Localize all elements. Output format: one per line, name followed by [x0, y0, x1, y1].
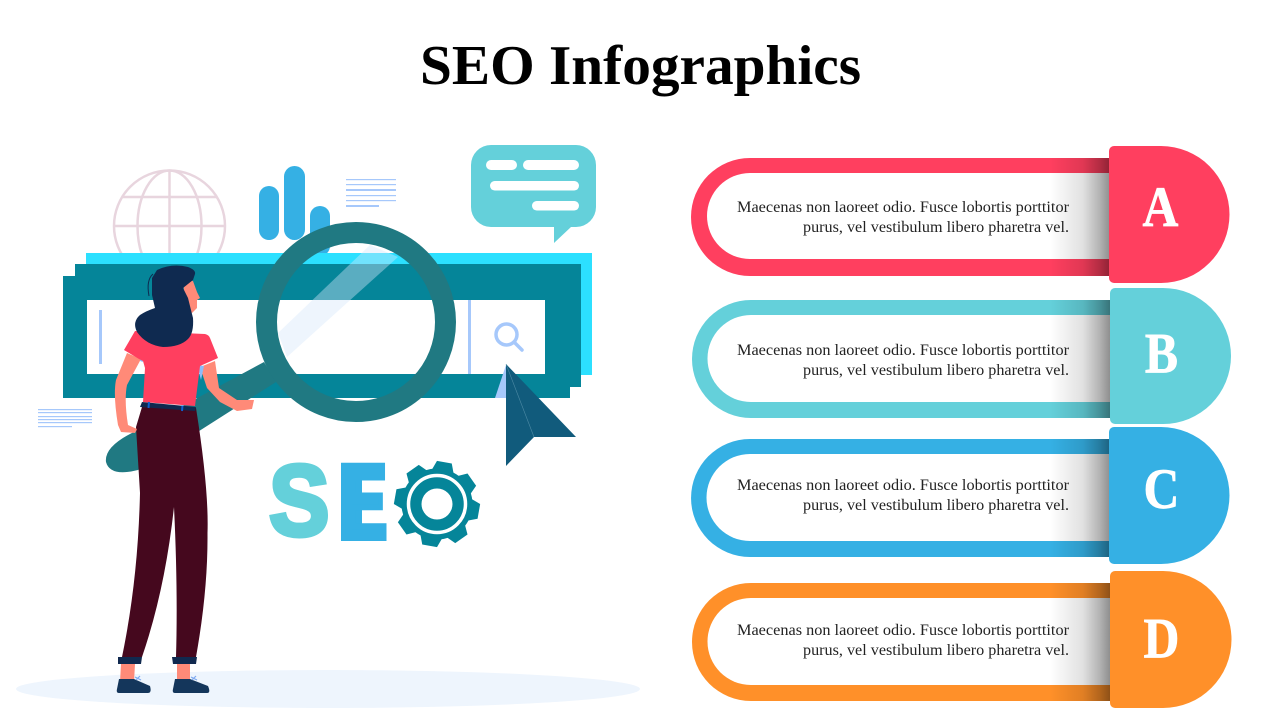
body text: purus, vel vestibulum libero pharetra vel.	[803, 362, 1069, 379]
letter S: S	[269, 446, 329, 557]
tab	[1109, 427, 1229, 564]
body text: Maecenas non laoreet odio. Fusce lobortis porttitor	[737, 342, 1070, 359]
pill outline	[691, 158, 1111, 276]
tab	[1109, 146, 1229, 283]
shoes	[117, 679, 209, 693]
left arm	[115, 353, 141, 433]
body text	[737, 477, 1070, 514]
fold shadow	[1050, 158, 1111, 276]
shirt	[124, 331, 218, 406]
body text: purus, vel vestibulum libero pharetra vel.	[803, 497, 1069, 514]
ring	[266, 232, 446, 412]
ankles	[120, 664, 190, 682]
icon: gear	[393, 460, 481, 548]
cuffs	[118, 657, 197, 664]
fold shadow	[1050, 439, 1111, 557]
shoelaces	[135, 676, 197, 680]
ground shadow	[16, 670, 640, 708]
magnifying glass	[106, 232, 446, 472]
pill outline	[691, 439, 1111, 557]
pill interior	[706, 454, 1111, 541]
body text: Maecenas non laoreet odio. Fusce lobortis porttitor	[737, 199, 1070, 216]
icon: bar chart	[259, 166, 330, 256]
letter: D	[1144, 608, 1179, 670]
title: SEO Infographics	[420, 35, 861, 97]
letter E: E	[338, 444, 387, 561]
body text	[737, 622, 1070, 659]
icon: speech bubble	[471, 145, 596, 243]
blue highlights under sleeves	[140, 350, 204, 380]
body text: purus, vel vestibulum libero pharetra vel.	[803, 642, 1069, 659]
icon: globe	[114, 170, 225, 282]
right arm	[200, 361, 254, 411]
pill outline	[692, 583, 1111, 701]
card D	[692, 571, 1232, 708]
search bar	[63, 253, 592, 398]
letter: B	[1145, 323, 1178, 385]
icon: search glass	[496, 324, 522, 350]
pill interior	[708, 598, 1111, 685]
hair	[135, 266, 195, 347]
belt	[140, 402, 196, 411]
trousers	[122, 407, 208, 657]
SEO wordmark	[269, 444, 481, 561]
pill interior	[708, 315, 1111, 402]
illustration: SEO search scene	[16, 145, 640, 708]
card B	[692, 288, 1231, 424]
body text: purus, vel vestibulum libero pharetra vel.	[803, 219, 1069, 236]
body text	[737, 199, 1070, 236]
letter: A	[1143, 176, 1179, 239]
text lines: upper	[346, 179, 396, 207]
body text: Maecenas non laoreet odio. Fusce lobortis porttitor	[737, 477, 1070, 494]
letter: C	[1144, 458, 1179, 521]
woman figure	[115, 266, 254, 693]
lens glare	[278, 245, 398, 357]
body text: Maecenas non laoreet odio. Fusce lobortis porttitor	[737, 622, 1070, 639]
face	[183, 278, 200, 313]
fold shadow	[1050, 583, 1111, 701]
card C	[691, 427, 1229, 564]
text lines: left	[38, 409, 92, 427]
pill interior	[707, 173, 1111, 259]
hair strand	[148, 274, 153, 296]
handle	[106, 362, 276, 472]
card A	[691, 146, 1229, 283]
tab	[1110, 571, 1232, 708]
body text	[737, 342, 1070, 379]
tab	[1110, 288, 1231, 424]
pill outline	[692, 300, 1111, 418]
icon: cursor arrow	[495, 364, 576, 466]
fold shadow	[1050, 300, 1111, 418]
